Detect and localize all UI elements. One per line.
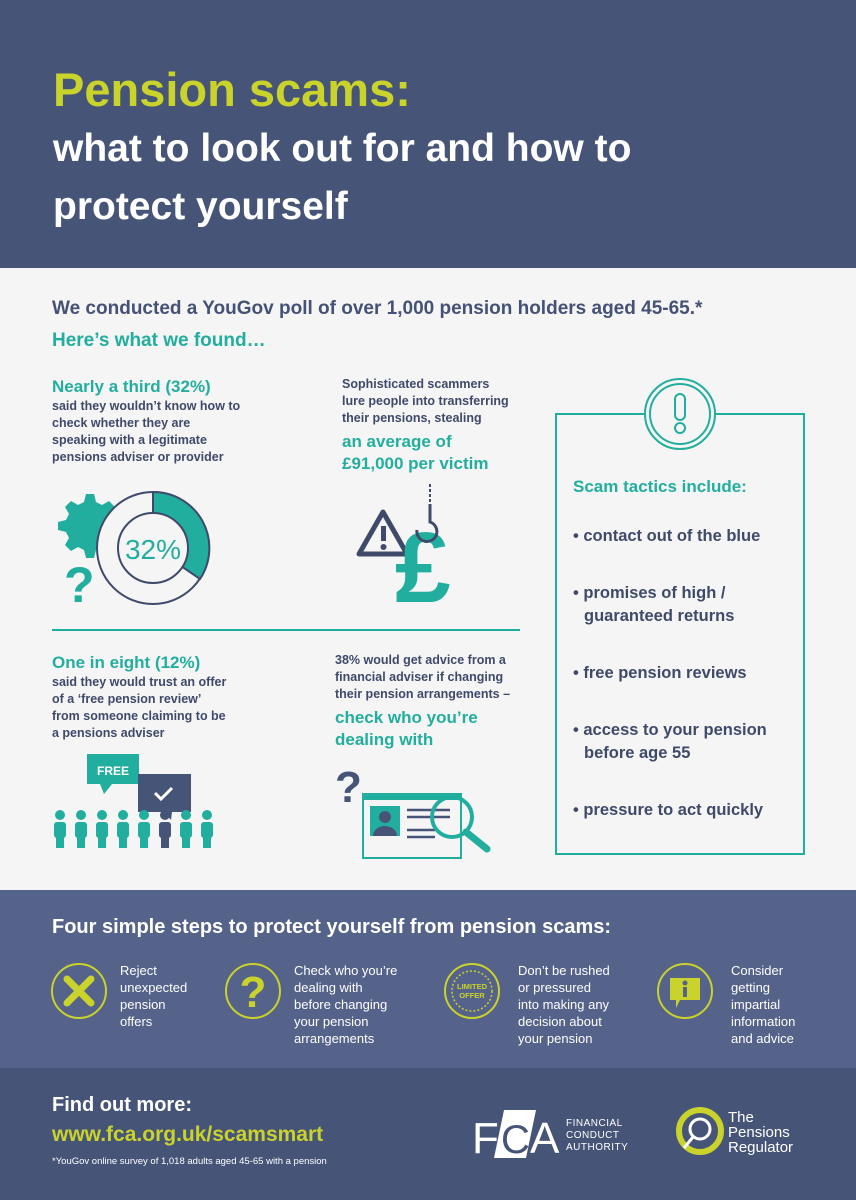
stat: nearly a third: Nearly a third (32%) <box>52 377 211 396</box>
find out more text: *YouGov online survey of 1,018 adults aged 45-65 with a pension <box>52 1156 327 1167</box>
stat: scammers: Sophisticated scammers <box>342 377 489 391</box>
stat: 38% advice: their pension arrangements – <box>335 687 510 701</box>
footer <box>0 1068 856 1200</box>
icon: people with speech bubbles <box>54 754 213 848</box>
step 2: before changing <box>294 997 387 1012</box>
stat: scammers: £91,000 per victim <box>342 454 488 473</box>
step 3: OFFER <box>459 991 485 1000</box>
stat: one in eight <box>52 653 226 740</box>
intro text <box>52 298 702 351</box>
stat: nearly a third <box>52 377 240 464</box>
step 4: Consider <box>731 963 783 978</box>
stat: nearly a third: said they wouldn’t know how to <box>52 399 240 413</box>
find out more text <box>52 1094 327 1167</box>
logo: FCA: CONDUCT <box>566 1130 620 1141</box>
logo: The Pensions Regulator: The <box>728 1109 754 1126</box>
logo: FCA: FINANCIAL <box>566 1118 623 1129</box>
title <box>52 63 631 228</box>
step 4: information <box>731 1014 795 1029</box>
logo: The Pensions Regulator: Regulator <box>728 1139 793 1156</box>
stat: one in eight: from someone claiming to be <box>52 709 226 723</box>
logo: The Pensions Regulator <box>676 1107 793 1156</box>
panel: scam tactics <box>555 413 805 855</box>
logo: The Pensions Regulator: Pensions <box>728 1124 790 1141</box>
heading: scam tactics: Scam tactics include: <box>573 477 747 496</box>
step 1 <box>51 963 187 1029</box>
step 4 <box>657 963 795 1046</box>
list of tactics <box>573 527 767 819</box>
icon: hook, warning, pound <box>356 484 451 607</box>
heading: four steps: Four simple steps to protect yourself from pension scams: <box>52 916 611 938</box>
stat: 38% advice: 38% would get advice from a <box>335 653 506 667</box>
list of tactics: • access to your pension before age 55 <box>573 721 767 762</box>
stat: nearly a third: check whether they are <box>52 416 190 430</box>
step 2 <box>225 963 397 1046</box>
step 1: Reject <box>120 963 157 978</box>
step 3: your pension <box>518 1031 592 1046</box>
step 3: Don’t be rushed <box>518 963 610 978</box>
stat: scammers: an average of <box>342 432 452 451</box>
stat: 38% advice <box>335 653 510 749</box>
title: what to look out for and how to <box>53 127 631 170</box>
step 2: ? <box>240 968 266 1017</box>
stat: 38% advice: financial adviser if changing <box>335 670 503 684</box>
step 3: into making any <box>518 997 609 1012</box>
panel: four steps <box>0 890 856 1068</box>
step 4: impartial <box>731 997 780 1012</box>
list of tactics: • contact out of the blue <box>573 527 760 545</box>
stat: scammers <box>342 377 509 473</box>
logo: FCA: AUTHORITY <box>566 1142 628 1153</box>
find out more text: www.fca.org.uk/scamsmart <box>52 1123 323 1146</box>
stat: one in eight: a pensions adviser <box>52 726 165 740</box>
logo: FCA <box>472 1110 628 1160</box>
step 1: unexpected <box>120 980 187 995</box>
find out more text: Find out more: <box>52 1094 192 1116</box>
icon: exclamation circle <box>644 378 716 450</box>
divider <box>52 629 520 631</box>
intro text: We conducted a YouGov poll of over 1,000 pension holders aged 45-65.* <box>52 298 702 319</box>
stat: scammers: their pensions, stealing <box>342 411 482 425</box>
step 3: decision about <box>518 1014 602 1029</box>
step 2: dealing with <box>294 980 363 995</box>
step 2: your pension <box>294 1014 368 1029</box>
icon: donut chart 32%: ? <box>64 557 95 613</box>
header band <box>0 0 856 268</box>
step 1: offers <box>120 1014 152 1029</box>
stat: one in eight: of a ‘free pension review’ <box>52 692 201 706</box>
icon: donut chart 32% <box>58 491 210 613</box>
stat: nearly a third: pensions adviser or provider <box>52 450 224 464</box>
step 1: pension <box>120 997 166 1012</box>
stat: one in eight: One in eight (12%) <box>52 653 200 672</box>
list of tactics: • promises of high / guaranteed returns <box>573 584 734 625</box>
stat: nearly a third: speaking with a legitimate <box>52 433 207 447</box>
step 3: or pressured <box>518 980 591 995</box>
stat: 38% advice: check who you’re <box>335 708 478 727</box>
list of tactics: • pressure to act quickly <box>573 801 763 819</box>
stat: scammers: lure people into transferring <box>342 394 509 408</box>
step 2: arrangements <box>294 1031 374 1046</box>
step 4: and advice <box>731 1031 794 1046</box>
title: Pension scams: <box>53 63 411 116</box>
title: protect yourself <box>53 185 348 228</box>
icon: ID card with magnifier: ? <box>335 763 362 812</box>
stat: one in eight: said they would trust an offer <box>52 675 226 689</box>
stat: 38% advice: dealing with <box>335 730 433 749</box>
icon: people with speech bubbles: FREE <box>97 764 129 778</box>
step 3: LIMITED <box>457 982 488 991</box>
intro text: Here’s what we found… <box>52 330 266 351</box>
icon: ID card with magnifier <box>335 763 490 859</box>
step 4: getting <box>731 980 770 995</box>
step 3 <box>444 963 610 1046</box>
step 2: Check who you’re <box>294 963 397 978</box>
icon: donut chart 32%: 32% <box>125 534 181 565</box>
list of tactics: • free pension reviews <box>573 664 747 682</box>
